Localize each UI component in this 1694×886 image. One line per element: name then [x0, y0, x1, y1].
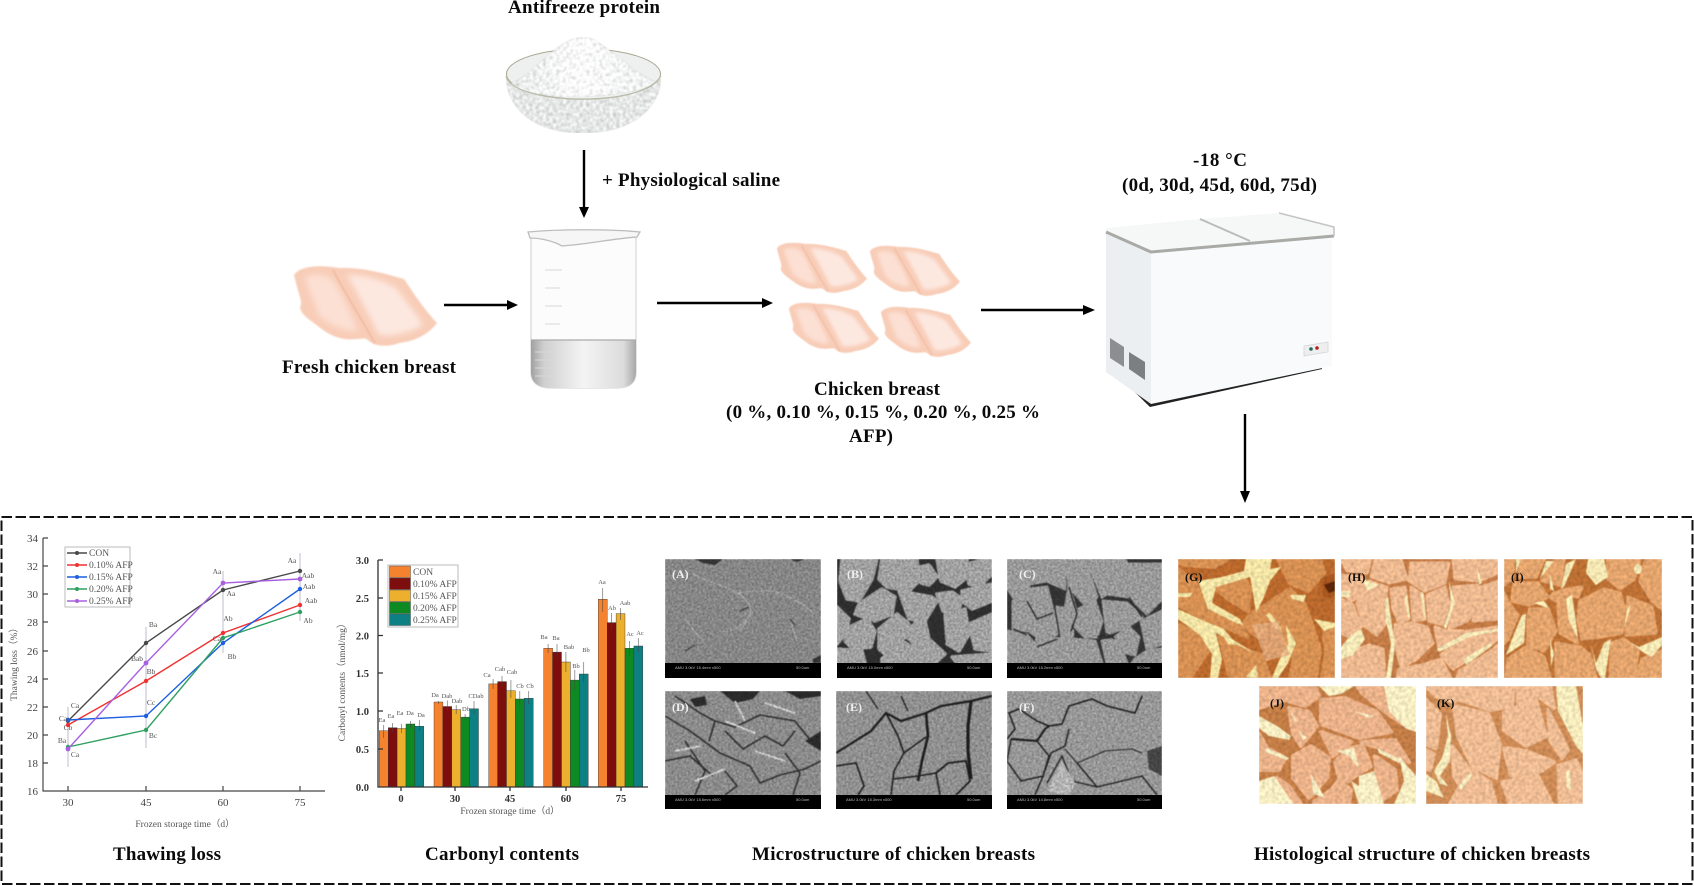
line chart: thawing loss: Bb — [147, 667, 156, 676]
arrow: samples to freezer — [981, 305, 1095, 315]
bar chart: carbonyl contents: Ba — [552, 635, 560, 642]
panel: SEM D: (D) — [672, 700, 689, 714]
bar chart: carbonyl contents: 1.0 — [356, 707, 369, 718]
line chart: thawing loss: Cb — [64, 723, 73, 732]
panel: results dashed box — [2, 517, 1692, 884]
line chart: thawing loss — [8, 533, 325, 830]
panel: histology J — [1259, 686, 1416, 804]
line chart: thawing loss: 28 — [27, 617, 38, 629]
bars: day 0 — [379, 724, 424, 787]
bars: day 30 — [434, 702, 478, 787]
bars: day 60 — [544, 648, 588, 787]
panel: SEM A: AMU 3.0kV 15.4mm x500 — [675, 665, 721, 670]
bar chart: carbonyl contents — [336, 556, 648, 817]
bars: day 45 — [489, 682, 533, 787]
label: chicken breast treatment groups: Chicken breast — [814, 379, 941, 400]
line chart: thawing loss: 22 — [27, 702, 38, 714]
panel: histology K — [1426, 686, 1583, 804]
bar chart: carbonyl contents: Cb — [526, 683, 534, 690]
label: chicken breast treatment groups — [726, 379, 1040, 447]
bar chart: carbonyl contents: Cab — [507, 669, 517, 676]
panel: histology J: (J) — [1270, 696, 1284, 710]
line chart: thawing loss: Aa — [213, 567, 222, 576]
panel: SEM B — [837, 559, 992, 678]
legend: carbonyl contents: 0.25% AFP — [413, 616, 457, 626]
line chart: thawing loss: Ca — [213, 634, 222, 643]
line chart: thawing loss: Ca — [71, 750, 80, 759]
bar chart: carbonyl contents: Ea — [397, 710, 404, 717]
bars: day 75 — [598, 599, 643, 787]
bar chart: carbonyl contents: Ca — [483, 672, 491, 679]
bar chart: carbonyl contents: Bab — [564, 644, 574, 651]
panel: SEM F: 50.0um — [1137, 797, 1151, 802]
bar chart: carbonyl contents: Cab — [495, 666, 505, 673]
line chart: thawing loss: Aab — [303, 582, 315, 591]
arrow: powder to beaker — [579, 150, 589, 218]
legend: thawing loss: 0.10% AFP — [89, 561, 133, 571]
arrow: beaker to chicken samples — [657, 298, 773, 308]
line chart: thawing loss: Ca — [71, 701, 80, 710]
line chart: thawing loss: 60 — [218, 797, 229, 809]
heading: microstructure: Microstructure of chicken breasts — [752, 844, 1035, 865]
icon: beaker with saline — [528, 230, 640, 388]
line chart: thawing loss: 75 — [294, 797, 306, 809]
panel: SEM E — [836, 691, 992, 809]
bar chart: carbonyl contents: Dab — [442, 693, 452, 700]
bar chart: carbonyl contents: 60 — [561, 794, 571, 805]
heading: thawing loss: Thawing loss — [113, 844, 221, 865]
legend: carbonyl contents: CON — [413, 568, 433, 578]
bar chart: carbonyl contents: Frozen storage time（d） — [460, 805, 560, 817]
line chart: thawing loss: Bab — [131, 654, 143, 663]
bar chart: carbonyl contents: 0 — [398, 794, 404, 805]
line chart: thawing loss: 24 — [27, 674, 38, 686]
bar chart: carbonyl contents: 1.5 — [356, 669, 369, 680]
line chart: thawing loss: Aab — [305, 596, 317, 605]
legend: thawing loss — [65, 547, 133, 607]
legend: carbonyl contents: 0.15% AFP — [413, 592, 457, 602]
panel: histology I — [1504, 559, 1662, 678]
line chart: thawing loss: 30 — [62, 797, 74, 809]
bar chart: carbonyl contents: 0.0 — [356, 783, 369, 794]
bar chart: carbonyl contents: Bb — [572, 663, 580, 670]
legend: thawing loss: 0.15% AFP — [89, 573, 133, 583]
panel: SEM C: 50.0um — [1137, 665, 1151, 670]
line chart: thawing loss: Ca — [59, 714, 68, 723]
panel: SEM E: 50.0um — [967, 797, 981, 802]
line chart: thawing loss: 45 — [140, 797, 152, 809]
line chart: thawing loss: Ba — [58, 736, 67, 745]
icon: powder dish — [506, 37, 661, 133]
line chart: thawing loss: 18 — [27, 758, 38, 770]
panel: SEM A — [665, 559, 821, 678]
panel: SEM C — [1007, 559, 1162, 678]
panel: SEM C: (C) — [1019, 567, 1036, 581]
bar chart: carbonyl contents: Ea — [388, 713, 395, 720]
line chart: thawing loss: Ab — [303, 616, 313, 625]
line chart: thawing loss: 34 — [27, 533, 38, 545]
bar chart: carbonyl contents: Db — [462, 706, 470, 713]
line chart: thawing loss: Cc — [147, 698, 156, 707]
label: chicken breast treatment groups: AFP) — [849, 426, 893, 447]
line chart: thawing loss: 20 — [27, 730, 38, 742]
heading: carbonyl contents: Carbonyl contents — [425, 844, 579, 865]
bar chart: carbonyl contents: 2.0 — [356, 632, 369, 642]
line chart: thawing loss: Ba — [149, 620, 158, 629]
bar chart: carbonyl contents: Aab — [620, 600, 630, 607]
panel: SEM F — [1007, 691, 1162, 809]
line chart: thawing loss: 16 — [27, 786, 38, 798]
line chart: thawing loss: 30 — [27, 589, 38, 601]
legend: carbonyl contents: 0.20% AFP — [413, 604, 457, 614]
panel: SEM A: 50.0um — [796, 665, 810, 670]
line chart: thawing loss: Bb — [228, 652, 237, 661]
legend: carbonyl contents — [388, 565, 458, 627]
line chart: thawing loss: Thawing loss（%） — [8, 623, 20, 701]
bar chart: carbonyl contents: Aa — [598, 579, 606, 586]
legend: thawing loss: CON — [89, 549, 109, 559]
bar chart: carbonyl contents: Cb — [516, 683, 524, 690]
panel: SEM B: 50.0um — [967, 665, 981, 670]
bar chart: carbonyl contents: 3.0 — [356, 556, 369, 567]
legend: thawing loss: 0.20% AFP — [89, 585, 133, 595]
bar chart: carbonyl contents: 0.5 — [356, 745, 369, 756]
legend: carbonyl contents: 0.10% AFP — [413, 580, 457, 590]
panel: histology I: (I) — [1511, 570, 1524, 584]
panel: histology G — [1178, 559, 1335, 678]
bar chart: carbonyl contents: Ac — [626, 631, 634, 638]
panel: SEM D: 50.0um — [796, 797, 810, 802]
panel: histology H: (H) — [1348, 570, 1365, 584]
bar chart: carbonyl contents: Ab — [608, 605, 616, 612]
panel: SEM E: AMU 3.0kV 15.3mm x500 — [846, 797, 892, 802]
panel: SEM D: AMU 3.0kV 15.6mm x500 — [675, 797, 721, 802]
icon: chest freezer — [1106, 213, 1334, 407]
bar chart: carbonyl contents: Da — [417, 712, 425, 719]
panel: SEM D — [665, 691, 821, 809]
bar chart: carbonyl contents: Ac — [636, 630, 644, 637]
heading: histological structure: Histological structure of chicken breasts — [1254, 844, 1590, 865]
panel: SEM F: AMU 3.0kV 14.8mm x500 — [1017, 797, 1063, 802]
bar chart: carbonyl contents: 2.5 — [356, 594, 369, 605]
line chart: thawing loss: Bc — [149, 731, 158, 740]
label: storage conditions: -18 °C — [1193, 150, 1247, 171]
label: storage conditions: (0d, 30d, 45d, 60d, 75d) — [1122, 175, 1317, 196]
bar chart: carbonyl contents: Ea — [379, 717, 386, 724]
panel: SEM A: (A) — [672, 567, 689, 581]
panel: histology K: (K) — [1437, 696, 1454, 710]
bar chart: carbonyl contents: 30 — [450, 794, 460, 805]
panel: SEM C: AMU 3.0kV 15.2mm x500 — [1017, 665, 1063, 670]
icon: four chicken breast samples — [777, 243, 971, 357]
text: physiological saline: + Physiological saline — [602, 170, 780, 191]
line chart: thawing loss: 26 — [27, 646, 38, 658]
bar chart: carbonyl contents: CDab — [468, 693, 484, 700]
bar chart: carbonyl contents: Bb — [582, 647, 590, 654]
bar chart: carbonyl contents: Ba — [540, 634, 548, 641]
panel: histology G: (G) — [1185, 570, 1202, 584]
bar chart: carbonyl contents: 45 — [505, 794, 515, 805]
line chart: thawing loss: Frozen storage time（d） — [135, 818, 235, 830]
label: storage conditions — [1122, 150, 1317, 196]
icon: fresh chicken breast — [294, 266, 437, 346]
bar chart: carbonyl contents: Da — [431, 692, 439, 699]
arrow: chicken to beaker — [444, 300, 518, 310]
line chart: thawing loss: Aa — [227, 589, 236, 598]
label: chicken breast treatment groups: (0 %, 0.10 %, 0.15 %, 0.20 %, 0.25 % — [726, 402, 1040, 423]
arrow: freezer to results — [1240, 414, 1250, 503]
label: fresh chicken breast: Fresh chicken breast — [282, 357, 457, 378]
panel: SEM E: (E) — [846, 700, 862, 714]
bar chart: carbonyl contents: 75 — [616, 794, 626, 805]
panel: SEM B: (B) — [847, 567, 863, 581]
bar chart: carbonyl contents: Da — [406, 710, 414, 717]
panel: SEM F: (F) — [1019, 700, 1034, 714]
panel: SEM B: AMU 3.0kV 15.0mm x500 — [847, 665, 893, 670]
legend: thawing loss: 0.25% AFP — [89, 597, 133, 607]
bar chart: carbonyl contents: Carbonyl contents（nmol/mg） — [336, 619, 348, 741]
line chart: thawing loss: Ab — [223, 614, 233, 623]
bar chart: carbonyl contents: Dab — [452, 698, 462, 705]
line chart: thawing loss: Aab — [302, 571, 314, 580]
panel: histology H — [1341, 559, 1498, 678]
line chart: thawing loss: 32 — [27, 561, 38, 573]
line chart: thawing loss: Aa — [288, 556, 297, 565]
